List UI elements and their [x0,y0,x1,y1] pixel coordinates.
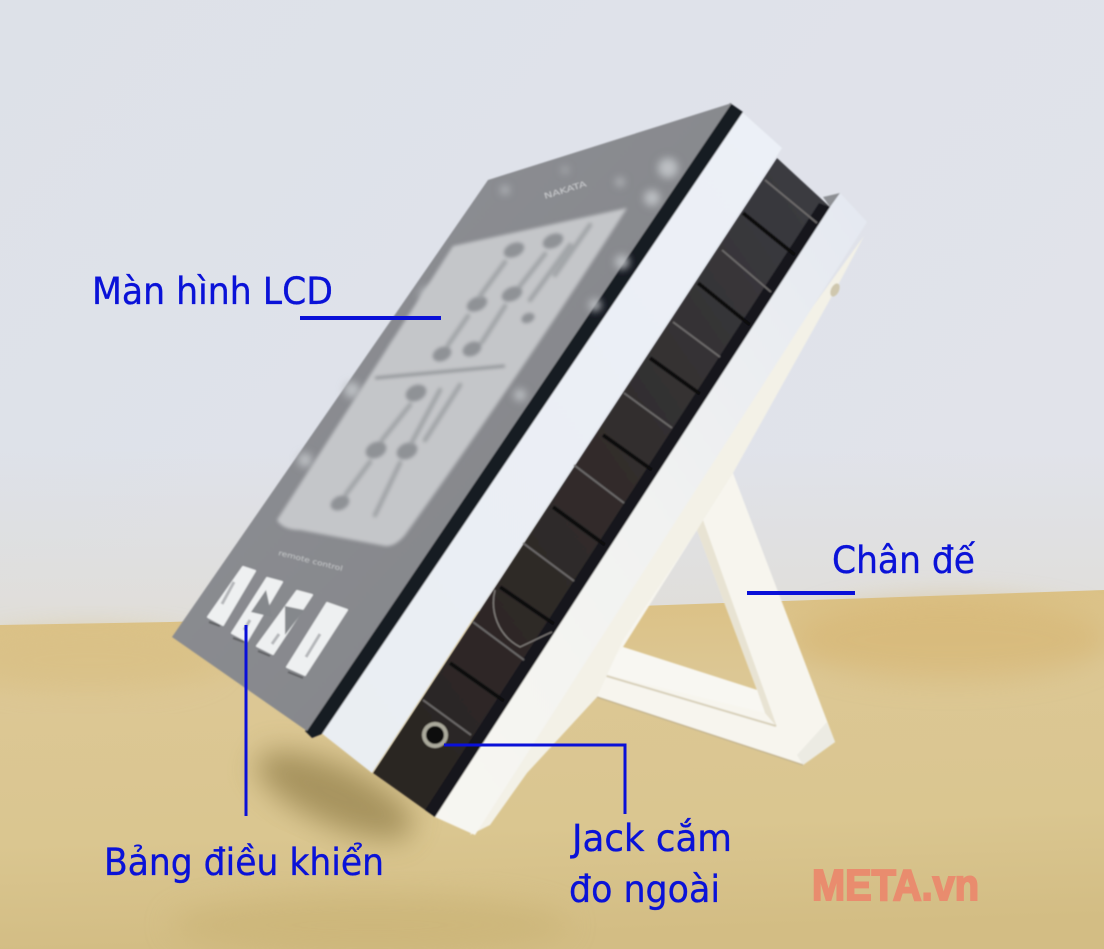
front glass edge [305,103,743,738]
rear frame [435,193,867,835]
stand leg [540,473,835,765]
button 2 [232,578,282,642]
label: Jack cắm đo ngoài: Jack cắm [570,817,732,860]
glass speckles [298,158,678,467]
cream side band [470,236,864,835]
background: wall [0,0,1104,650]
label: Jack cắm đo ngoài: đo ngoài [569,868,720,911]
device photo [172,103,867,835]
background: wooden table [0,590,1104,949]
front white bezel [320,112,782,773]
label: Chân đế: Chân đế [832,539,975,582]
control buttons [208,567,347,678]
digit segments [328,230,566,514]
watermark: META.vn: META.vn [812,861,979,910]
label: Bảng điều khiển: Bảng điều khiển [104,841,384,884]
small text strip on panel: remote control [278,549,344,573]
button 4 [287,603,347,678]
label: Jack cắm đo ngoài [444,745,732,911]
front face panel [172,103,732,731]
jack socket [422,722,448,748]
button 1 [208,567,255,626]
white frame face [435,193,867,835]
button 3 [257,591,312,656]
LCD screen [277,208,627,546]
brand text on panel: NAKATA [543,179,588,201]
label: Màn hình LCD: Màn hình LCD [92,270,333,313]
ribbed black back [373,158,830,817]
